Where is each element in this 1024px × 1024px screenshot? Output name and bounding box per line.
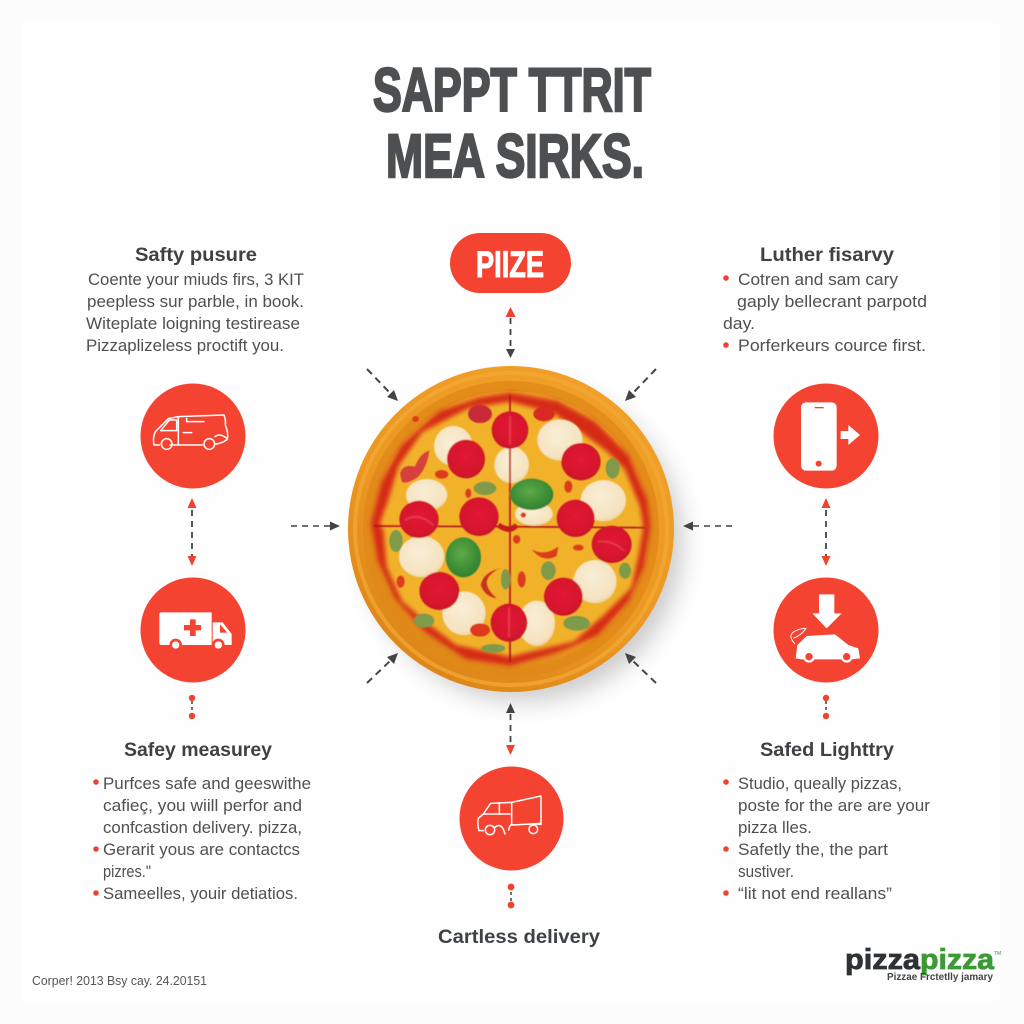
- sauce: [373, 395, 648, 663]
- text block: bottom right: sustiver.: [738, 863, 794, 881]
- logo: [845, 944, 1001, 983]
- text block: bottom left: [93, 739, 311, 903]
- text block: top left: [86, 244, 304, 355]
- icon: outline truck: [460, 766, 564, 870]
- badge: PIIZE: [450, 233, 571, 293]
- arrow: diagonal top right: [625, 369, 656, 401]
- text block: top right: Porferkeurs cource first.: [738, 337, 926, 355]
- toppings: [374, 395, 645, 662]
- slice lines: [374, 395, 645, 662]
- arrow: right to pizza: [683, 522, 732, 530]
- text block: bottom right: [723, 739, 931, 903]
- text block: bottom right: Safetly the, the part: [738, 841, 888, 859]
- logo: TM: [994, 951, 1001, 957]
- arrow: left to pizza: [291, 522, 340, 530]
- logo: Pizzae Frctetlly jamary: [887, 972, 993, 983]
- icon: outline van: [140, 384, 246, 488]
- text block: bottom left: Sameelles, youir detiatios.: [103, 885, 298, 903]
- connector dots: right: [823, 695, 829, 719]
- icon: car with down arrow: [774, 578, 878, 682]
- basil leaves: [446, 479, 553, 577]
- pepperoni highlights: [405, 417, 623, 637]
- logo: pizza: [920, 944, 995, 976]
- text block: top right: Luther fisarvy: [760, 244, 894, 266]
- text block: bottom right: poste for the are are your: [738, 797, 931, 815]
- text block: top left: peepless sur parble, in book.: [87, 293, 304, 311]
- icon: ambulance: [140, 578, 246, 682]
- text block: bottom left: Gerarit yous are contactcs: [103, 841, 300, 859]
- arrow: right icons: [822, 498, 830, 566]
- arrow: diagonal top left: [367, 369, 398, 401]
- text block: top right: [723, 244, 927, 355]
- text block: top left: Witeplate loigning testirease: [86, 315, 300, 333]
- text block: top right: Cotren and sam cary: [738, 271, 899, 289]
- text block: bottom right: Safed Lighttry: [760, 739, 894, 761]
- text block: top right: day.: [723, 315, 755, 333]
- arrow: pizza to badge: [506, 307, 516, 358]
- text block: top left: Pizzaplizeless proctift you.: [86, 337, 284, 355]
- text block: bottom right: “lit not end reallans”: [738, 885, 892, 903]
- text block: top left: Safty pusure: [135, 244, 257, 266]
- title: SAPPT TTRIT: [373, 56, 651, 124]
- text block: bottom left: Safey measurey: [124, 739, 272, 761]
- heading: bottom center: Cartless delivery: [438, 926, 600, 948]
- pizza: [348, 366, 682, 701]
- sauce splatter: [397, 405, 584, 637]
- connector dots: bottom: [508, 884, 514, 908]
- cheese slices: [399, 419, 626, 646]
- arrow: left icons: [188, 498, 196, 566]
- text block: top right: gaply bellecrant parpotd: [737, 293, 927, 311]
- connector dots: left: [189, 695, 195, 719]
- text block: bottom right: Studio, queally pizzas,: [738, 775, 902, 793]
- arrow: diagonal bottom right: [625, 653, 656, 683]
- text block: bottom left: cafieç, you wiill perfor and: [103, 797, 302, 815]
- text block: bottom left: confcastion delivery. pizza,: [103, 819, 302, 837]
- text block: top left: Coente your miuds firs, 3 KIT: [88, 271, 304, 289]
- text block: bottom left: pizres.": [103, 863, 151, 881]
- arrow: pizza to bottom icon: [506, 703, 515, 755]
- pepperoni: [399, 411, 632, 642]
- small leaves: [389, 458, 631, 653]
- title: MEA SIRKS.: [386, 122, 644, 190]
- footer text: Corper! 2013 Bsy cay. 24.20151: [32, 974, 207, 988]
- text block: bottom left: Purfces safe and geeswithe: [103, 775, 311, 793]
- logo: pizza: [845, 944, 921, 976]
- text block: bottom right: pizza lles.: [738, 819, 812, 837]
- icon: phone with arrow: [774, 384, 878, 488]
- badge: PIIZE: PIIZE: [476, 244, 544, 285]
- title: [373, 56, 651, 190]
- arrow: diagonal bottom left: [367, 653, 398, 683]
- cheese: [382, 403, 642, 655]
